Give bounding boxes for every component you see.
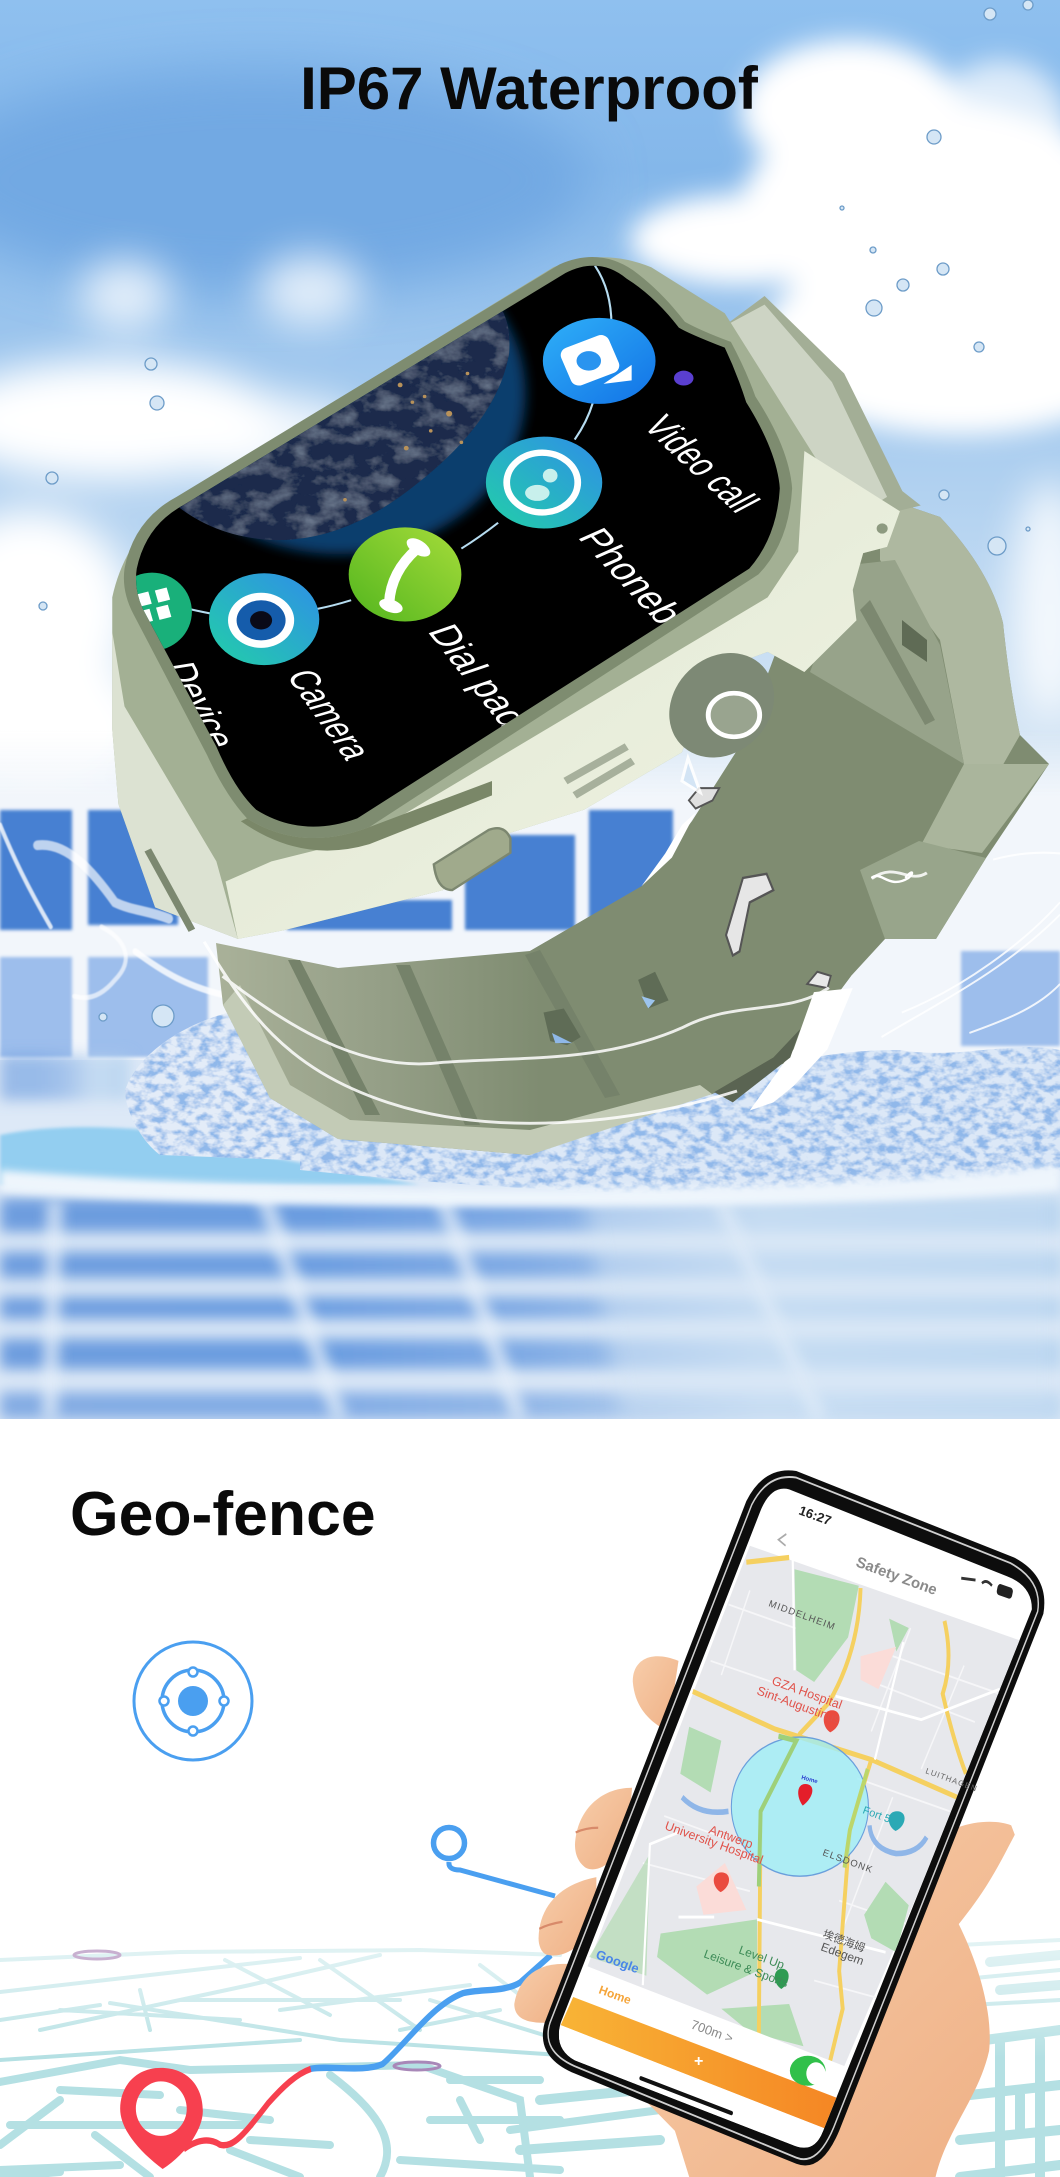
phone text labels: 埃德海姆 [821,1927,867,1955]
label: Dial pad: Dial pad [419,619,539,733]
landmark glyph: left [74,1951,120,1959]
map area [587,1546,1025,2070]
water droplets [39,0,1033,1027]
screen title: Safety Zone [854,1554,939,1599]
home indicator [641,2078,731,2113]
map background lines [0,1940,1060,2177]
splash strands over band [204,758,927,1123]
pool water [0,1060,1060,1419]
home row [594,1969,844,2070]
icon: camera lens dot [674,371,694,386]
earth city lights [343,372,469,502]
route: blue upper with ring [434,1828,555,1896]
landmark glyph: right [394,2062,440,2070]
icon: geo-fence target [134,1642,252,1760]
phone text labels: Google [594,1947,641,1976]
icon: device [136,572,192,649]
window wall panels [0,810,1060,1057]
phone text labels: Level Up [737,1943,787,1972]
label: Phonebook: Phonebook [568,523,731,672]
digital crown [648,634,796,777]
phone text labels: Edegem [819,1940,866,1968]
earth wallpaper [177,302,509,540]
watch strap: upper right [530,500,1049,1143]
route lines and location pin [120,1955,551,2169]
foam splash [125,1010,420,1165]
phone: screen [558,1488,1032,2148]
phone text labels: Leisure & Sports [702,1947,790,1990]
band slots and buckle hardware [544,788,912,1110]
connector line between apps [189,266,611,615]
phone text labels: LUITHAGEN [924,1766,979,1794]
watch case [112,257,900,939]
watch strap: lower band [216,886,851,1155]
foam waterline left [0,1127,420,1185]
phone text labels: Fort 5 [861,1805,892,1826]
phone text labels: Home [597,1983,633,2007]
hand: fingers [514,1656,678,2023]
wall haze [0,730,1060,1070]
phone text labels: Antwerp [707,1823,755,1852]
map street grid [643,1581,1000,2004]
speaker slots [566,747,633,795]
phone: body [543,1470,1044,2166]
pool tile lines [50,1190,820,1419]
hand holding phone [514,1468,1060,2177]
map hospital zones [696,1647,896,1915]
right splash strands [882,853,1060,1037]
icon: video call [543,318,656,404]
route: red [184,2069,311,2149]
label: Device: Device [156,659,246,750]
phone text labels [594,1503,979,2070]
route: blue lower [310,1955,551,2069]
status time: 16:27 [797,1503,833,1528]
phone text labels: 700m > [689,2017,735,2046]
icon: camera [209,573,319,665]
side button: smiley [434,828,510,890]
hand: palm [643,1816,1015,2177]
icon: red location pin [120,2068,203,2169]
watch case: white lower body [226,451,900,939]
pale water wash right [580,1170,1060,1419]
heading: Geo-fence: Geo-fence [70,1479,376,1549]
phone text labels: MIDDELHEIM [767,1598,837,1633]
clouds: left [0,254,1060,810]
panel: geo-fence white section [0,1419,1060,2177]
phone text labels: Home [800,1775,819,1785]
title: IP67 Waterproof: IP67 Waterproof [300,55,759,122]
map water [682,1797,927,1854]
watch screen [136,266,780,827]
smartwatch [100,230,1049,1155]
icon: phonebook [486,437,602,528]
map parks [589,1569,909,2046]
phone text labels: + [694,2053,703,2070]
phone text labels: University Hospital [663,1819,765,1867]
geofence circle [731,1737,868,1876]
label: Video call: Video call [634,409,769,519]
orange action bar [561,1997,837,2129]
panel: waterproof photo background [0,0,1060,1419]
map roads [693,1558,966,2060]
watch case: inner bezel [124,257,792,838]
phone text labels: Sint-Augustinus [755,1684,842,1727]
deep sky tone [0,70,590,290]
icon: dial pad [349,527,461,621]
back arrow [778,1534,786,1546]
earth wallpaper glow [197,309,534,562]
clouds: right [630,40,1060,435]
toggle switch [790,2056,826,2086]
phone text labels: GZA Hospital [770,1674,844,1712]
status icons [961,1578,992,1586]
left splash strands [0,825,230,998]
map pins [714,1710,905,1989]
label: Camera: Camera [277,665,381,764]
phone text labels: ELSDONK [821,1847,875,1876]
watch app labels [156,409,769,764]
watch case: translucent strap loop [723,296,921,511]
